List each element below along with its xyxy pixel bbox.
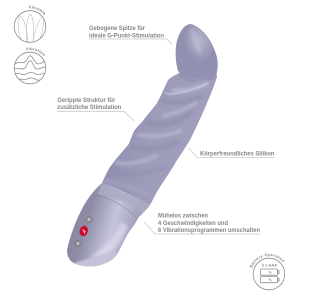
icon: vibration (14, 47, 46, 84)
label: ribbed structure: zusätzliche Stimulation (57, 104, 121, 111)
label: speeds and programs (144, 212, 260, 234)
icon: vibration: Vibration (26, 47, 45, 56)
battery 1: % (268, 271, 272, 275)
label: curved tip: ideale G-Punkt-Stimulation (89, 32, 164, 39)
label: curved tip (89, 25, 172, 44)
label: ribbed structure (57, 97, 134, 121)
icon: flexible (14, 6, 46, 43)
control button: plus (86, 216, 92, 223)
control button: minus (75, 240, 81, 247)
curved tip (176, 24, 218, 80)
label: ribbed structure: Gerippte Struktur für (57, 97, 116, 104)
icon: battery operated: 2 x AAA (262, 262, 277, 268)
label: body-friendly silicone (189, 148, 275, 158)
battery 2: % (268, 278, 272, 282)
icon: battery operated: Battery Operated (250, 254, 285, 268)
label: speeds and programs: Mühelos zwischen (158, 212, 208, 220)
icon: flexible: Flexible (29, 6, 46, 15)
label: speeds and programs: 4 Geschwindigkeiten und (158, 220, 228, 227)
label: body-friendly silicone: Körperfreundliches Silikon (200, 150, 274, 158)
product: silicone vibrator (67, 24, 218, 266)
label: curved tip: Gebogene Spitze für (89, 25, 145, 32)
silicone shaft (102, 73, 217, 205)
label: speeds and programs: 6 Vibrationsprogrammen umschalten (158, 227, 260, 234)
icon: battery operated (250, 254, 286, 290)
control button: red logo (78, 225, 89, 237)
metal base (67, 183, 150, 266)
